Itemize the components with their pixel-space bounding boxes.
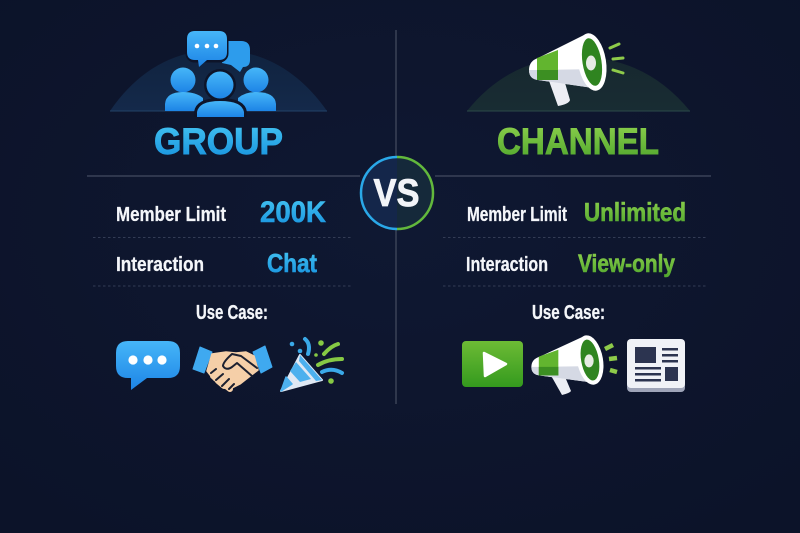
VS badge xyxy=(360,156,434,230)
second chat bubble xyxy=(222,41,250,72)
horizontal rules xyxy=(87,175,711,177)
icon: chat bubble xyxy=(116,341,180,390)
center person xyxy=(194,69,247,117)
label: interaction: Interaction xyxy=(466,254,548,276)
icon: newspaper xyxy=(627,339,685,392)
icon: handshake xyxy=(193,346,272,390)
heading: CHANNEL: CHANNEL xyxy=(497,121,659,162)
dome: group xyxy=(110,50,327,111)
icon: megaphone xyxy=(529,31,623,106)
right person xyxy=(238,68,276,111)
label: interaction: Interaction xyxy=(116,254,204,276)
label: member limit: Member Limit xyxy=(467,204,567,226)
label: use case: Use Case: xyxy=(532,302,605,324)
value: 200K: 200K xyxy=(260,196,327,229)
value: Unlimited: Unlimited xyxy=(584,197,686,227)
VS badge: VS xyxy=(374,172,420,215)
heading: GROUP: GROUP xyxy=(154,121,283,162)
channel rows xyxy=(443,197,707,324)
icon: party popper xyxy=(281,339,342,391)
first chat bubble xyxy=(186,30,228,67)
value: View-only: View-only xyxy=(578,250,675,278)
label: use case: Use Case: xyxy=(196,302,268,324)
icon: video play tile xyxy=(462,341,523,387)
value: Chat: Chat xyxy=(267,248,317,278)
icon: group of people with chat bubbles xyxy=(165,30,276,117)
group rows xyxy=(93,196,353,324)
label: member limit: Member Limit xyxy=(116,204,226,226)
center vertical divider xyxy=(395,30,397,404)
dome: channel xyxy=(467,57,690,111)
icon: megaphone small xyxy=(531,334,617,395)
left person xyxy=(165,68,203,111)
